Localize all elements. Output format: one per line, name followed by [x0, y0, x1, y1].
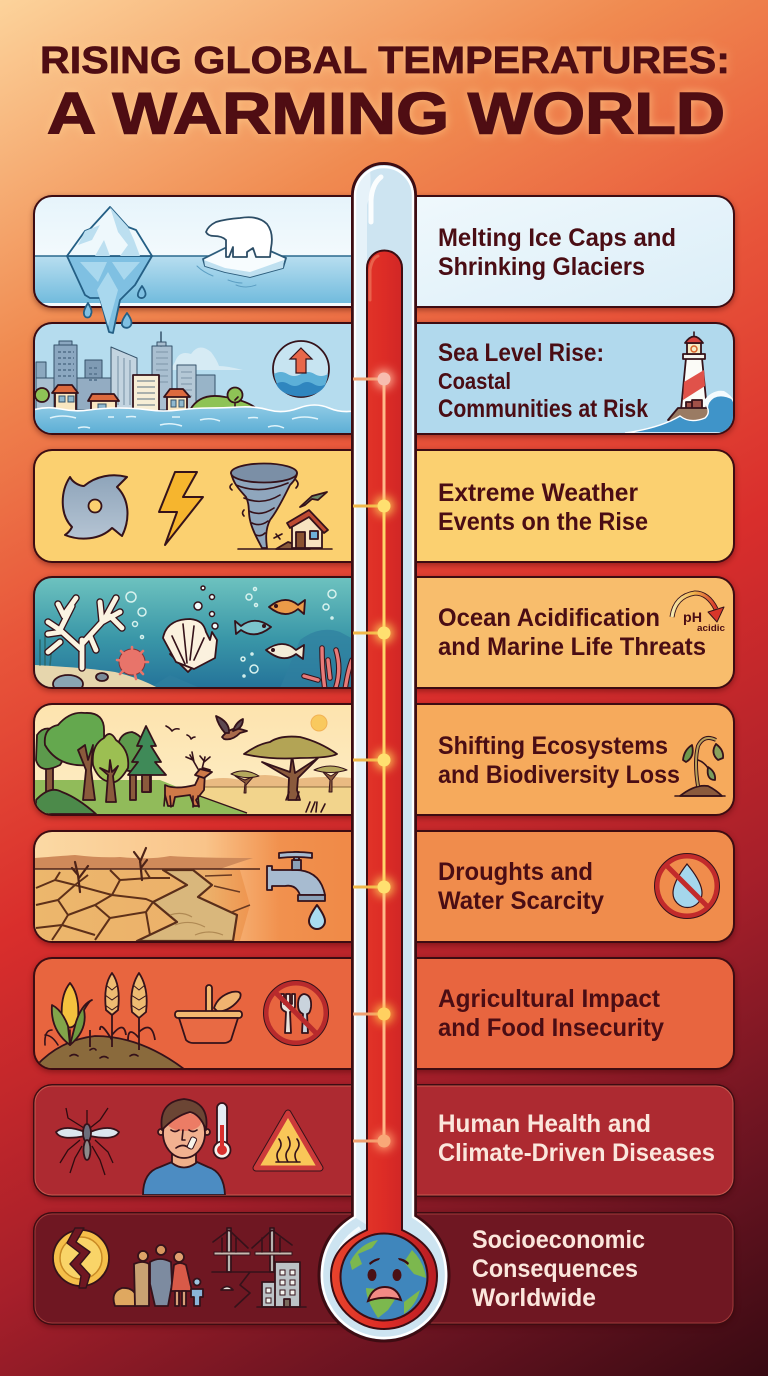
panel 4 label: and Marine Life Threats — [438, 633, 706, 661]
icon: displaced family — [114, 1245, 203, 1306]
icon: birds — [166, 716, 247, 739]
icon: pH arc: acidic — [697, 623, 725, 634]
panel 3 label: Extreme Weather — [438, 479, 638, 507]
panel 5 label: Shifting Ecosystems — [438, 732, 668, 760]
icon: dead trees — [72, 848, 147, 892]
icon: tornado and house — [230, 464, 332, 549]
panel 9 label — [472, 1226, 645, 1312]
panel 5: shifting ecosystems — [33, 703, 735, 817]
icon: wilting plant — [675, 738, 725, 796]
thermometer glass tube and bulb — [319, 164, 449, 1341]
panel 9 label: Socioeconomic — [472, 1226, 645, 1254]
panel 4 illustration: reef — [35, 578, 351, 687]
icon: pH arc — [672, 593, 725, 634]
panel 1 illustration: sky, sea, polar bear — [35, 197, 375, 306]
panel 2 illustration: flooded city — [35, 324, 351, 433]
title: A WARMING WORLD — [47, 82, 725, 146]
panel 2 label: Coastal — [438, 368, 511, 394]
icon: deer — [164, 752, 212, 807]
icon: lightning bolt — [159, 472, 203, 545]
icon: thermometer — [214, 1103, 230, 1158]
icon: forest trees — [36, 713, 166, 814]
panel 3: extreme weather — [33, 449, 735, 563]
icon: basket with bread — [175, 985, 242, 1043]
icon: teal fish — [235, 621, 271, 634]
icon: broken bridge — [212, 1228, 292, 1307]
panel 2 label: Communities at Risk — [438, 395, 648, 423]
panel 2 label: Sea Level Rise: — [438, 339, 604, 367]
icon: acacia trees — [231, 737, 347, 812]
icon: heat warning — [256, 1113, 320, 1168]
panel 7 label: Agricultural Impact — [438, 985, 661, 1013]
icon: red coral — [304, 648, 352, 690]
thermometer — [319, 164, 449, 1341]
icon: lighthouse and wave — [625, 332, 735, 433]
icon: crops on soil — [36, 973, 184, 1069]
panel 6 label — [415, 832, 733, 941]
panel 8 label — [438, 1110, 715, 1167]
panel 9: socioeconomic — [33, 1212, 735, 1325]
panel 2 label — [415, 324, 733, 433]
panel 9 label: Consequences — [472, 1255, 638, 1283]
title — [40, 40, 730, 146]
icon: no water — [654, 854, 720, 918]
panel 8 label: Human Health and — [438, 1110, 651, 1138]
panel 1 label — [415, 197, 733, 306]
panel 9 label: Worldwide — [472, 1284, 596, 1312]
panel 4 label: Ocean Acidification — [438, 604, 660, 632]
panel 1 label: Melting Ice Caps and — [438, 224, 676, 252]
panel 7 label — [438, 985, 664, 1042]
panel 5 label — [415, 705, 733, 814]
icon: pink coral — [117, 647, 148, 679]
icon: cyclone — [63, 475, 127, 539]
bubbles — [126, 586, 336, 677]
panel 7 label: and Food Insecurity — [438, 1014, 664, 1042]
panel 6 label: Droughts and — [438, 858, 593, 886]
panel 5 illustration: forest to savanna — [35, 705, 375, 817]
panel 6 illustration: cracked earth — [35, 832, 375, 941]
icon: iceberg — [67, 207, 152, 333]
icon: worried earth — [340, 1234, 428, 1320]
icon: pH arc: pH — [683, 609, 702, 625]
panel 8: human health — [33, 1084, 735, 1197]
red mercury column — [331, 251, 437, 1329]
panel 5 label: and Biodiversity Loss — [438, 761, 680, 789]
level markers — [353, 370, 393, 1150]
panel 2: sea level rise — [33, 322, 735, 436]
icon: water tap — [267, 852, 325, 929]
icon: pale fish — [266, 644, 304, 659]
panel 7: agriculture — [33, 957, 735, 1070]
icon: bleached coral — [48, 598, 122, 668]
panel 6: droughts — [33, 830, 735, 943]
icon: polar bear — [206, 217, 272, 257]
panel 3 label — [438, 479, 648, 536]
panel 4 label — [415, 578, 733, 687]
panel 6 label: Water Scarcity — [438, 887, 604, 915]
panel 8 label: Climate-Driven Diseases — [438, 1139, 715, 1167]
icon: orange fish — [269, 600, 305, 614]
icon: damaged building — [257, 1262, 306, 1307]
panel 4: ocean acidification — [33, 576, 735, 693]
icon: water rising badge — [273, 341, 329, 397]
icon: no food — [264, 980, 328, 1046]
icon: sick person — [143, 1099, 225, 1195]
panel 1: melting ice caps — [33, 195, 735, 308]
icon: broken coin — [53, 1228, 109, 1288]
icon: sun — [311, 715, 327, 731]
glowing level line — [382, 379, 386, 1141]
panel 3 label: Events on the Rise — [438, 508, 648, 536]
icon: damaged shell — [163, 619, 217, 672]
panel 1 label: Shrinking Glaciers — [438, 253, 645, 281]
icon: mosquito — [56, 1108, 119, 1175]
title: RISING GLOBAL TEMPERATURES: — [40, 40, 730, 82]
